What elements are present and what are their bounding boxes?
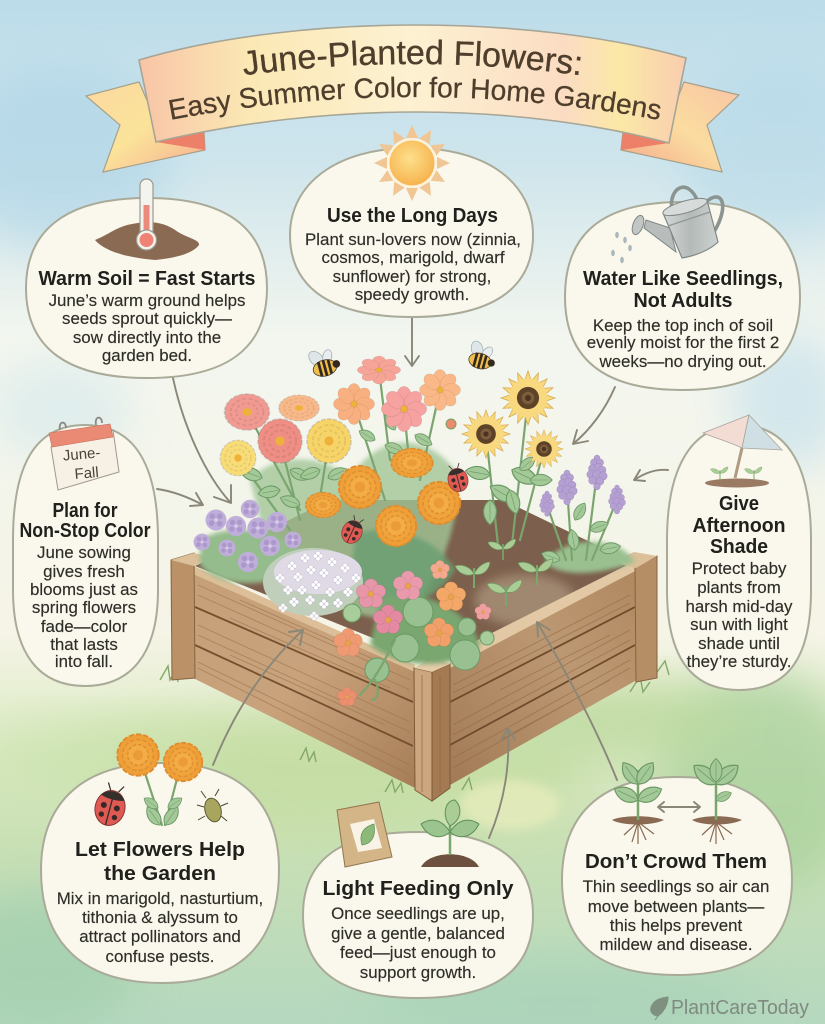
body text: June sowing bbox=[37, 543, 131, 562]
body text: speedy growth. bbox=[355, 285, 469, 304]
heading bbox=[583, 268, 783, 312]
title banner bbox=[84, 24, 740, 173]
body text: attract pollinators and bbox=[79, 927, 241, 946]
flowers: cosmos bbox=[333, 356, 461, 432]
icon: marigolds with ladybug and beetle bbox=[91, 734, 228, 829]
body text: June’s warm ground helps bbox=[49, 291, 245, 310]
body text: shade until bbox=[698, 634, 780, 653]
body text: sunflower) for strong, bbox=[333, 267, 491, 286]
flowers: alyssum mound bbox=[263, 548, 363, 621]
flowers: verbena bbox=[194, 500, 301, 572]
heading: Use the Long Days bbox=[327, 205, 498, 227]
body text: Keep the top inch of soil bbox=[593, 316, 773, 335]
body text: sun with light bbox=[690, 615, 788, 634]
flowers: sunflowers bbox=[462, 371, 563, 468]
panel: give afternoon shade bbox=[667, 415, 811, 690]
panel: plan for non-stop color bbox=[13, 418, 158, 686]
icon: thermometer in soil bbox=[95, 179, 199, 260]
panel: light feeding only bbox=[303, 800, 533, 998]
body text: Once seedlings are up, bbox=[331, 904, 505, 923]
icon: fertilizer bag bbox=[337, 802, 392, 867]
flowers: lavender bbox=[540, 455, 626, 517]
body text: Mix in marigold, nasturtium, bbox=[57, 889, 263, 908]
heading: Non-Stop Color bbox=[20, 520, 151, 542]
body text: plants from bbox=[697, 578, 781, 597]
body text bbox=[49, 291, 245, 365]
heading: Afternoon bbox=[692, 515, 786, 537]
corner post left bbox=[171, 553, 195, 680]
body text: gives fresh bbox=[43, 562, 125, 581]
ribbon folds bbox=[156, 132, 669, 150]
body text: sow directly into the bbox=[73, 328, 221, 347]
panel: warm soil bbox=[26, 179, 267, 378]
body text: that lasts bbox=[50, 635, 118, 654]
corner post front bbox=[414, 668, 432, 801]
body text: fade—color bbox=[41, 617, 128, 636]
panel: use the long days bbox=[290, 125, 533, 317]
arrows bbox=[157, 317, 668, 838]
body text: harsh mid-day bbox=[685, 597, 793, 616]
icon: shade umbrella with seedlings bbox=[703, 415, 782, 488]
panel: let flowers help bbox=[41, 734, 279, 983]
icon: leaf logo bbox=[651, 997, 668, 1020]
body text: spring flowers bbox=[32, 598, 136, 617]
body text bbox=[305, 230, 521, 304]
icon: calendar: June- bbox=[62, 444, 101, 465]
body text: give a gentle, balanced bbox=[331, 924, 505, 943]
heading: Warm Soil = Fast Starts bbox=[38, 268, 256, 290]
bees bbox=[304, 337, 500, 380]
body text: into fall. bbox=[55, 652, 113, 671]
heading: Light Feeding Only bbox=[322, 878, 514, 900]
body text: Protect baby bbox=[692, 559, 787, 578]
icon: sun bbox=[374, 125, 450, 201]
body text: feed—just enough to bbox=[340, 943, 496, 962]
body text: evenly moist for the first 2 bbox=[587, 333, 779, 352]
flowers: nasturtiums bbox=[332, 560, 494, 708]
watermark bbox=[651, 997, 809, 1020]
body text: blooms just as bbox=[30, 580, 138, 599]
brand name: PlantCareToday bbox=[671, 997, 809, 1019]
heading: Give bbox=[719, 493, 759, 515]
left wall bbox=[193, 566, 415, 788]
body text bbox=[587, 316, 779, 371]
soil bbox=[195, 500, 640, 662]
plant foliage bbox=[200, 370, 635, 664]
body text: confuse pests. bbox=[106, 947, 214, 966]
panel: water like seedlings bbox=[565, 187, 800, 390]
grass tufts bbox=[160, 661, 669, 793]
ribbon body bbox=[139, 25, 686, 143]
icon: spaced seedlings bbox=[612, 759, 743, 844]
icon: calendar: Fall bbox=[74, 464, 99, 483]
body text: weeks—no drying out. bbox=[598, 352, 767, 371]
icon: watering can bbox=[611, 187, 723, 263]
corner post right bbox=[635, 556, 657, 682]
body text: Plant sun-lovers now (zinnia, bbox=[305, 230, 521, 249]
right ribbon tail bbox=[621, 82, 739, 172]
body text bbox=[57, 889, 263, 966]
body text bbox=[583, 877, 769, 954]
body text: cosmos, marigold, dwarf bbox=[321, 248, 505, 267]
subtitle text: Easy Summer Color for Home Gardens bbox=[169, 76, 660, 120]
panel: don't crowd them bbox=[562, 759, 792, 975]
heading: the Garden bbox=[104, 863, 216, 885]
body text: support growth. bbox=[360, 963, 476, 982]
body text: they’re sturdy. bbox=[687, 652, 791, 671]
body text bbox=[685, 559, 793, 671]
seedlings in soil bbox=[455, 539, 553, 606]
body text: move between plants— bbox=[588, 897, 764, 916]
heading: Let Flowers Help bbox=[75, 839, 245, 861]
left ribbon tail bbox=[86, 82, 205, 172]
heading: Shade bbox=[710, 536, 768, 558]
body text bbox=[30, 543, 138, 671]
heading: Water Like Seedlings, bbox=[583, 268, 783, 290]
title text: June-Planted Flowers: bbox=[243, 39, 581, 76]
heading: Not Adults bbox=[634, 290, 732, 312]
body text: seeds sprout quickly— bbox=[62, 309, 232, 328]
body text: tithonia & alyssum to bbox=[82, 908, 238, 927]
body text bbox=[331, 904, 505, 982]
heading: Don’t Crowd Them bbox=[585, 851, 767, 873]
right wall bbox=[450, 570, 637, 785]
heading bbox=[692, 493, 786, 558]
flowers: marigolds bbox=[306, 449, 460, 546]
raised wooden garden bed bbox=[160, 500, 669, 801]
body text: mildew and disease. bbox=[599, 935, 753, 954]
heading bbox=[75, 839, 245, 885]
heading bbox=[20, 500, 151, 542]
flowers: zinnias bbox=[220, 394, 351, 476]
ladybugs in the bed bbox=[338, 462, 471, 547]
body text: this helps prevent bbox=[610, 916, 742, 935]
body text: garden bed. bbox=[102, 346, 192, 365]
heading: Plan for bbox=[52, 500, 118, 522]
icon: seedling in soil bbox=[421, 800, 479, 867]
icon: calendar bbox=[49, 418, 119, 490]
body text: Thin seedlings so air can bbox=[583, 877, 769, 896]
